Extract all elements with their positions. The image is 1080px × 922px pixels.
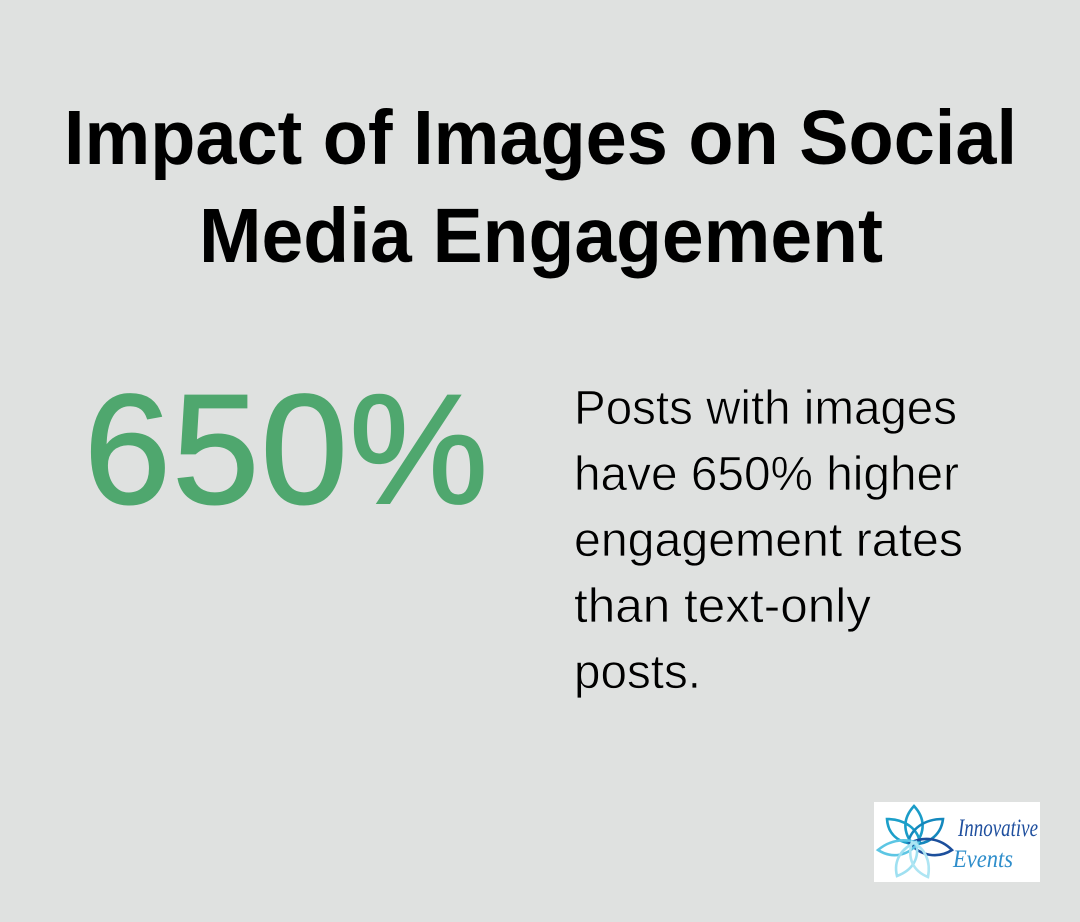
- description text: have 650% higher: [574, 448, 959, 501]
- description text: posts.: [574, 646, 701, 699]
- description text: Posts with images: [574, 382, 957, 435]
- statistic: 650%: 650%: [84, 363, 488, 537]
- description text: [574, 382, 963, 699]
- title: Media Engagement: [199, 193, 883, 279]
- title: Impact of Images on Social: [64, 95, 1017, 181]
- logo wordmark: Events: [952, 846, 1013, 873]
- description text: than text-only: [574, 580, 871, 633]
- logo: Innovative Events: [874, 802, 1040, 882]
- logo wordmark: [952, 815, 1038, 873]
- title: [64, 95, 1017, 279]
- icon: lotus flower: [878, 806, 952, 877]
- description text: engagement rates: [574, 514, 963, 567]
- logo wordmark: Innovative: [957, 815, 1038, 842]
